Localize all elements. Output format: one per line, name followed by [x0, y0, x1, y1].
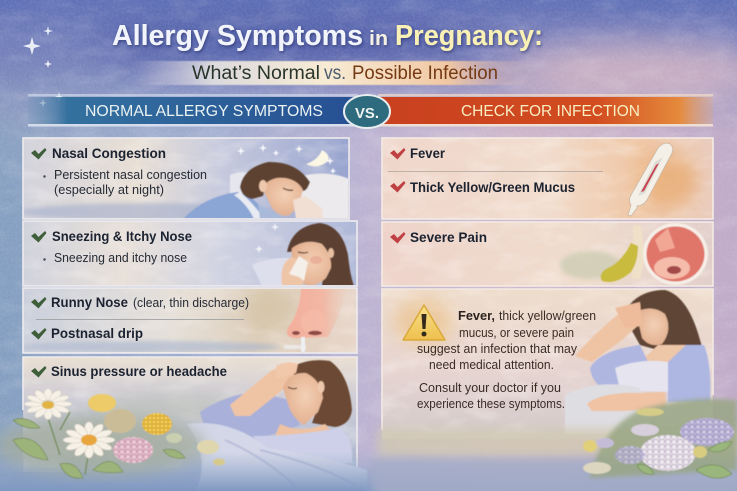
illustration: nose with drip [20, 288, 348, 353]
panel: nasal congestion [20, 138, 352, 221]
illustration: thermometer [628, 143, 698, 216]
panel: fever and thick mucus [382, 138, 713, 219]
illustration: sleeping woman with moon [20, 144, 352, 221]
daisy large [63, 422, 115, 458]
panel: warning message [382, 289, 713, 439]
warning text: Fever, [458, 308, 495, 323]
leaves [13, 419, 185, 478]
hydrangea [640, 435, 696, 471]
illustration: sinus cross-section with mucus [560, 223, 708, 285]
subtitle band [132, 61, 536, 85]
title [112, 20, 543, 52]
check icon [390, 232, 406, 244]
check icon [390, 181, 406, 192]
subtitle band: vs. [324, 63, 346, 84]
subtitle band: What’s Normal [192, 63, 320, 84]
warning text: mucus, or severe pain [459, 326, 574, 340]
symptom detail text [43, 168, 207, 197]
title: Pregnancy: [395, 20, 543, 52]
illustration: left flower bed [0, 388, 225, 478]
stems [48, 412, 88, 475]
panel: sinus pressure or headache [23, 357, 367, 491]
illustration: woman resting with hand on forehead [565, 290, 710, 434]
panel: fever and thick mucus: Fever [410, 145, 446, 161]
check icon [31, 231, 46, 242]
check icon [390, 148, 406, 160]
beige bloom [104, 409, 136, 433]
symptom detail text: Sneezing and itchy nose [54, 251, 187, 265]
symptom detail text: Persistent nasal congestion [54, 168, 207, 182]
left bottom haze [0, 452, 737, 491]
vs badge [344, 95, 390, 128]
gold bloom [142, 413, 172, 435]
symptom: runny nose: (clear, thin discharge) [133, 296, 249, 310]
pink bloom [113, 437, 153, 463]
warning text: need medical attention. [429, 358, 554, 372]
warning text: suggest an infection that may [417, 342, 578, 356]
small blooms [583, 408, 707, 474]
subtitle band: Possible Infection [352, 63, 498, 84]
check icon [31, 297, 46, 308]
illustration: woman sneezing into tissue [252, 223, 354, 286]
header band: normal allergy symptoms: NORMAL ALLERGY SYMPTOMS [85, 103, 323, 120]
warning text: thick yellow/green [499, 309, 596, 323]
symptom: runny nose: Runny Nose [51, 294, 128, 310]
illustration: right flower bed [372, 399, 737, 491]
warning text [417, 308, 596, 411]
panel: runny nose and postnasal drip: Postnasal drip [51, 325, 143, 341]
pale bloom [166, 433, 225, 466]
panel: runny nose and postnasal drip [20, 288, 357, 353]
vs badge: VS. [355, 106, 379, 122]
check icon [31, 328, 46, 340]
panel: sneezing and itchy nose: Sneezing & Itchy Nose [52, 228, 192, 244]
hydrangea [680, 418, 734, 446]
warning text: Consult your doctor if you [419, 381, 561, 395]
header band: normal allergy symptoms [28, 94, 358, 126]
panel: sinus pressure or headache: Sinus pressure or headache [51, 363, 227, 379]
header band: check for infection: CHECK FOR INFECTION [461, 103, 640, 120]
check icon [31, 148, 46, 160]
warning text: experience these symptoms. [417, 397, 565, 411]
daisy top [24, 388, 72, 420]
panel: fever and thick mucus: Thick Yellow/Green Mucus [410, 179, 575, 195]
header band: check for infection [378, 94, 713, 126]
panel: sneezing and itchy nose [23, 221, 357, 286]
panel: severe pain: Severe Pain [410, 229, 487, 245]
icon: warning triangle [403, 305, 445, 340]
yellow bloom [88, 394, 116, 412]
title: in [369, 28, 388, 50]
symptom detail text: (especially at night) [54, 183, 164, 197]
title: Allergy Symptoms [112, 20, 363, 52]
panel: nasal congestion: Nasal Congestion [52, 145, 166, 161]
illustration: woman with headache in bed [187, 360, 367, 491]
symptom: runny nose [51, 294, 249, 310]
check icon [31, 366, 46, 378]
leaves [637, 442, 732, 478]
panel: severe pain [382, 222, 713, 286]
